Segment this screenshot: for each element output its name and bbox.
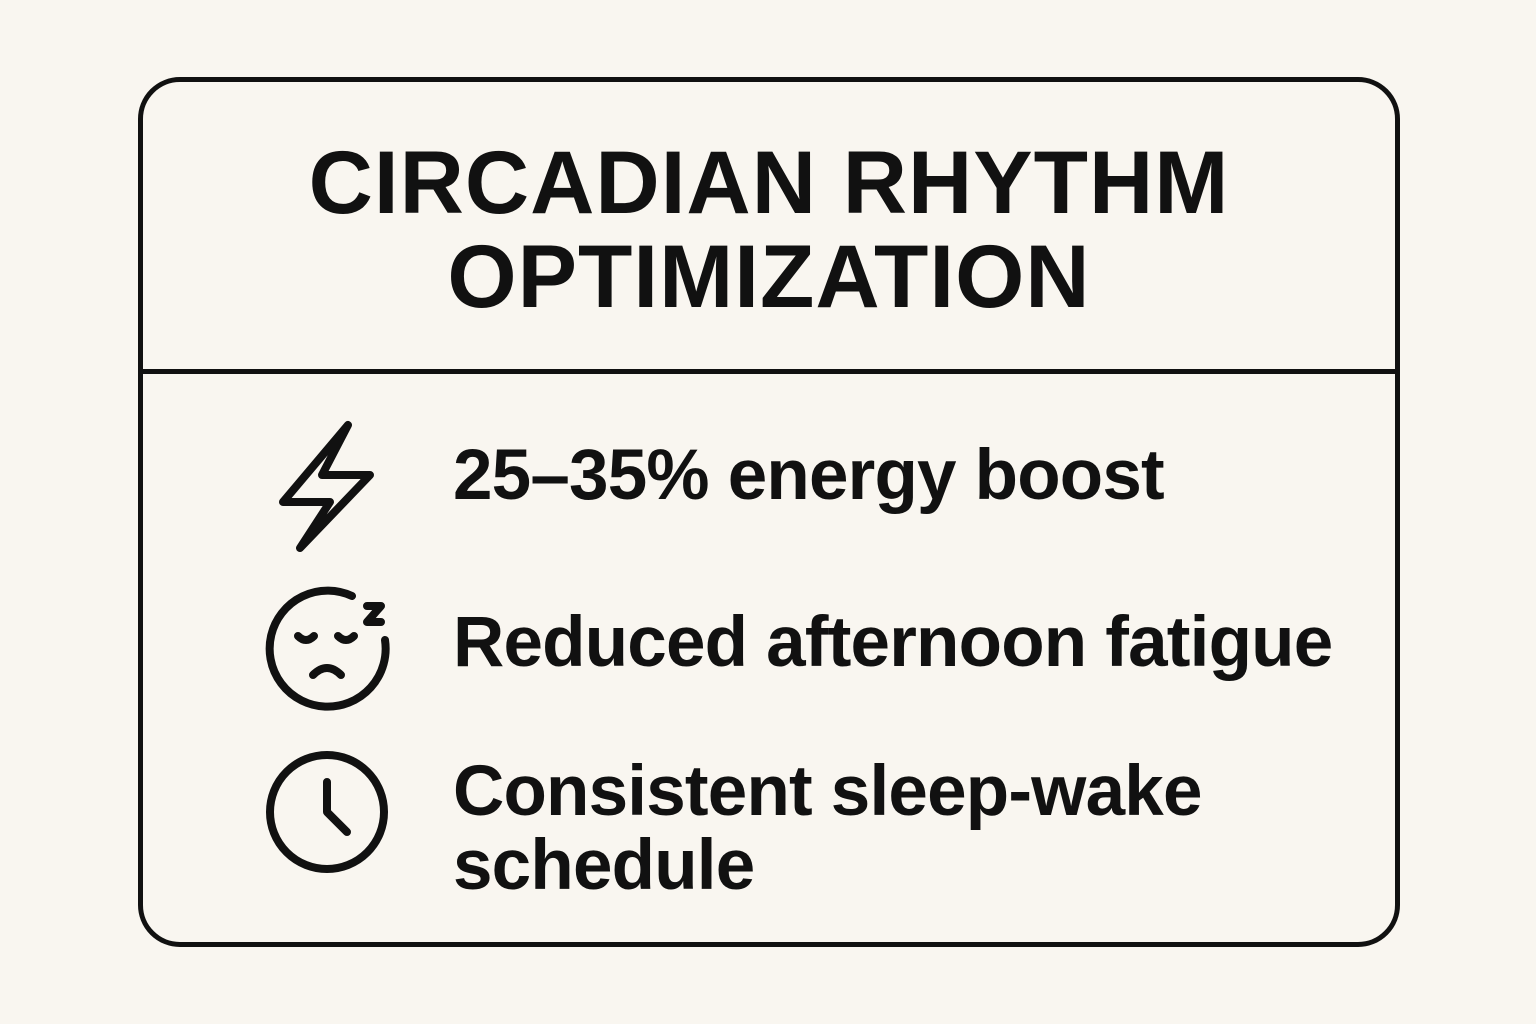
title: OPTIMIZATION xyxy=(447,226,1091,326)
text: reduced fatigue: Reduced afternoon fatigue xyxy=(453,603,1332,682)
title: CIRCADIAN RHYTHM xyxy=(309,132,1229,232)
icon: sleepy face xyxy=(266,586,390,711)
icon: lightning bolt xyxy=(279,420,374,552)
text: sleep-wake schedule: Consistent sleep-wake xyxy=(453,752,1202,831)
text: sleep-wake schedule xyxy=(453,752,1202,905)
title xyxy=(309,132,1229,326)
text: sleep-wake schedule: schedule xyxy=(453,826,754,905)
icon: clock xyxy=(266,751,388,873)
text: energy boost: 25–35% energy boost xyxy=(453,436,1164,515)
card panel xyxy=(138,77,1400,947)
